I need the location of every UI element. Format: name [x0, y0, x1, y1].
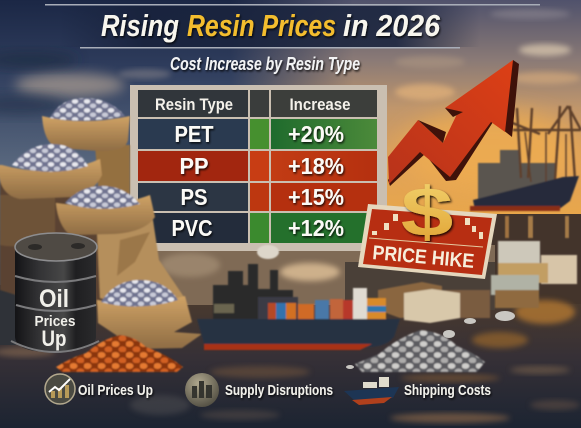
subtitle: Cost Increase by Resin Type — [170, 54, 360, 74]
ship bridge — [353, 288, 367, 320]
header row: Resin Type — [155, 95, 233, 114]
oil barrel — [11, 233, 99, 352]
row: PVC +12%: PVC — [172, 215, 212, 241]
distant buildings — [478, 150, 555, 208]
header row — [138, 90, 377, 117]
background: wall and clouds below table — [150, 245, 495, 310]
distant ship hull — [473, 176, 579, 210]
background: sky — [0, 0, 581, 285]
icon: small ship — [344, 377, 399, 405]
pale crate — [404, 289, 460, 323]
legend: oil prices up — [45, 374, 153, 404]
distant port skyline with cranes — [470, 106, 581, 211]
top sack — [42, 98, 130, 151]
barrel label: Prices — [34, 313, 76, 330]
price hike sign — [358, 173, 497, 279]
sign text: PRICE HIKE — [372, 242, 475, 273]
scattered pellets — [346, 311, 515, 369]
sign sparkles — [372, 214, 483, 239]
row: PET +20% — [138, 119, 377, 149]
legend: supply disruptions: Supply Disruptions — [225, 382, 333, 399]
row: PS +15%: PS — [180, 184, 208, 210]
legend: shipping costs: Shipping Costs — [404, 382, 491, 399]
row: PP +18%: +18% — [288, 153, 344, 179]
hull red stripe — [204, 344, 372, 350]
orange pellet pile — [56, 335, 183, 372]
row: PS +15%: +15% — [288, 184, 344, 210]
arrow notches — [418, 108, 463, 143]
back crate — [442, 290, 490, 318]
footer legend — [45, 373, 491, 407]
white resin pellet pile — [355, 330, 485, 372]
brown crate — [378, 282, 442, 318]
factory smoke — [257, 245, 279, 259]
header row: Increase — [290, 95, 350, 114]
red rising arrow — [388, 60, 519, 186]
row: PP +18% — [138, 151, 377, 181]
barrel label: Up — [42, 326, 66, 351]
resin sacks pile — [0, 98, 202, 372]
title: Rising — [101, 8, 179, 43]
middle sack — [0, 144, 102, 199]
barrel label: Oil — [39, 285, 69, 313]
arrow face — [388, 60, 513, 184]
title: in 2026 — [343, 8, 441, 43]
legend: shipping costs — [344, 377, 491, 405]
title: Resin Prices — [187, 8, 336, 43]
back sack bodies — [0, 160, 130, 305]
row: PS +15% — [138, 183, 377, 211]
title — [101, 8, 441, 43]
sign divider — [369, 238, 483, 247]
front sack with pellets — [97, 280, 202, 349]
sign board — [358, 204, 497, 279]
legend: supply disruptions — [185, 373, 333, 407]
lower sack — [56, 186, 155, 235]
right crate stacks — [491, 241, 577, 308]
dollar symbol: $ — [401, 173, 453, 251]
table frame — [130, 85, 387, 251]
row: PVC +12% — [138, 213, 377, 243]
icon: rising chart — [45, 374, 75, 404]
row: PVC +12%: +12% — [288, 215, 344, 241]
ship superstructure — [213, 264, 293, 322]
legend: oil prices up: Oil Prices Up — [78, 382, 153, 399]
background: harbour water — [0, 214, 581, 428]
port cranes — [510, 106, 581, 182]
containers — [258, 297, 386, 320]
row: PP +18%: PP — [180, 153, 208, 179]
table: cost increase by resin type — [130, 85, 387, 251]
foreground crates — [378, 241, 577, 323]
tan lower sack body — [97, 220, 186, 310]
arrow shadow side — [388, 60, 519, 186]
icon: factory — [185, 373, 219, 407]
row: PET +20%: PET — [174, 121, 214, 147]
container ship — [197, 245, 400, 350]
title band — [45, 4, 540, 48]
ship hull — [197, 319, 400, 347]
barrel label — [34, 285, 76, 351]
row: PET +20%: +20% — [288, 121, 344, 147]
